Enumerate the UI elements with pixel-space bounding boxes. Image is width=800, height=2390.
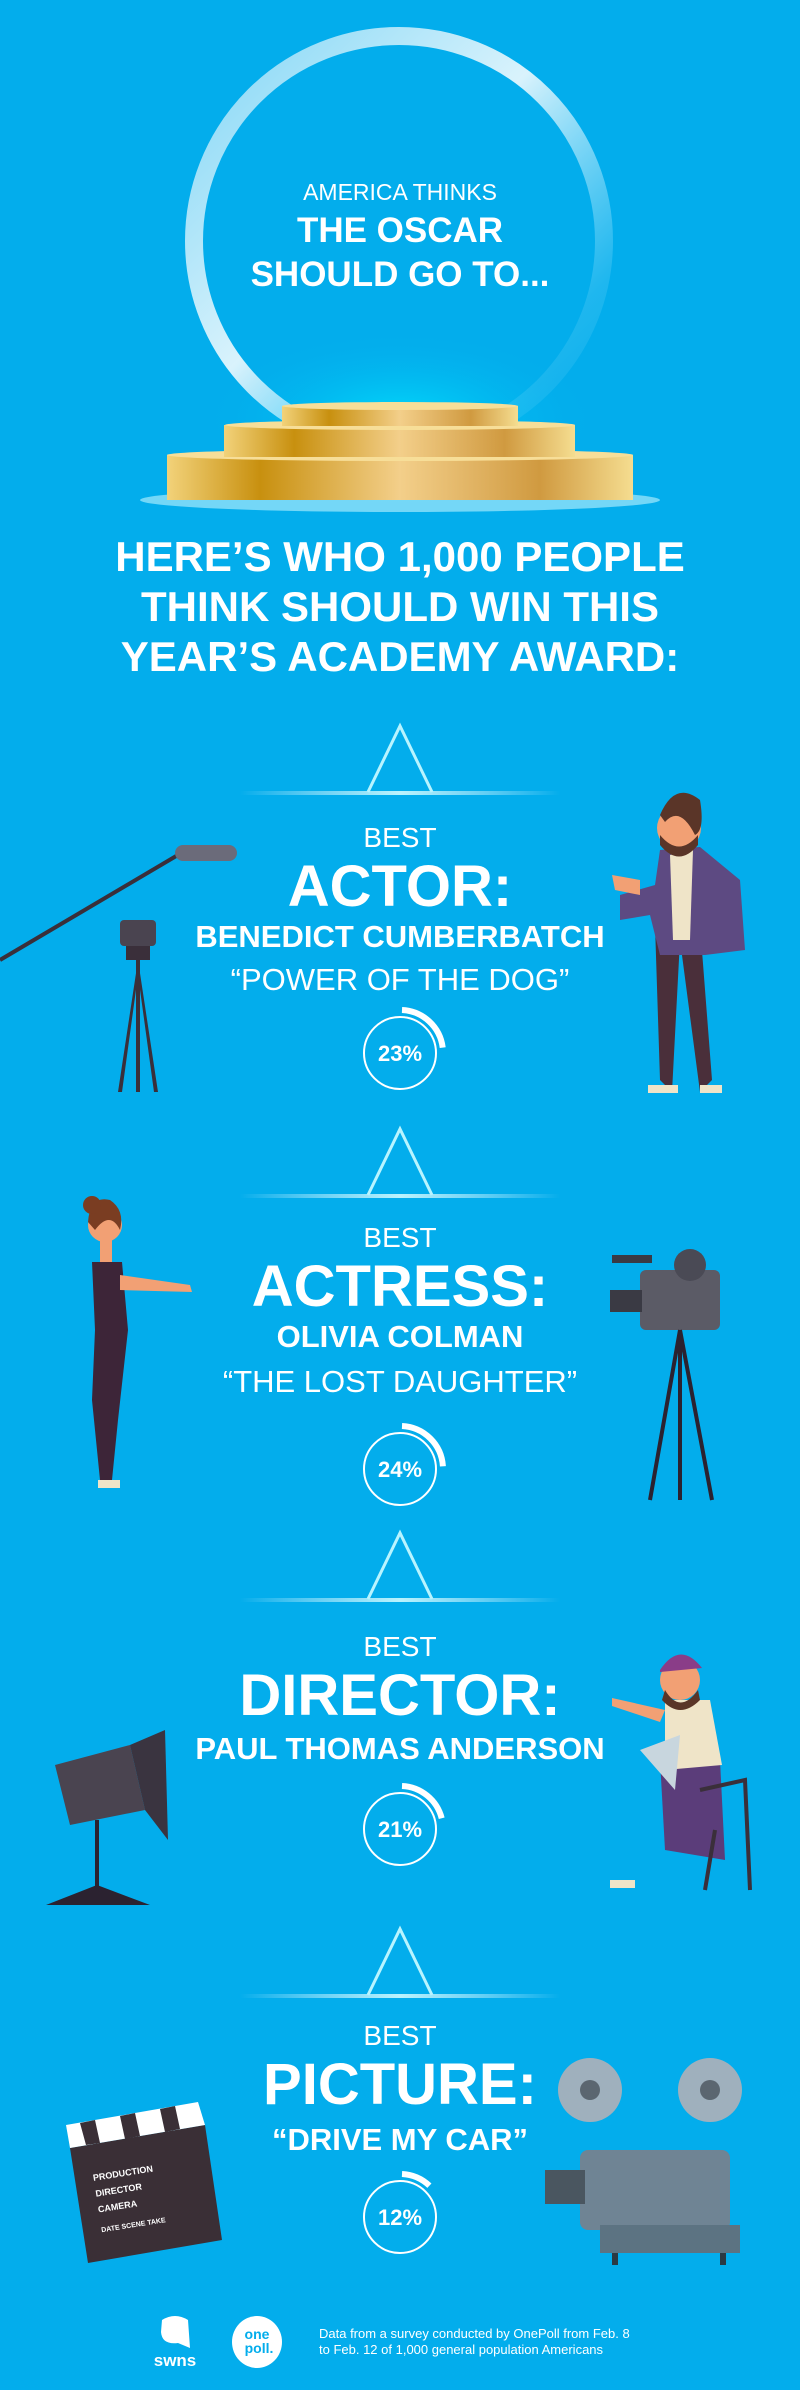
headline: YEAR’S ACADEMY AWARD: (121, 633, 679, 680)
icon: clapperboard (66, 2102, 222, 2263)
sparkle: director (240, 1533, 560, 1602)
icon: film camera on tripod (610, 1249, 720, 1500)
icon: boom mic (0, 845, 237, 960)
icon: clapperboard: PRODUCTION (92, 2164, 154, 2183)
icon: clapperboard: DIRECTOR (95, 2181, 143, 2199)
sparkle: actor (240, 726, 560, 795)
logo: swns: swns (154, 2351, 196, 2370)
percent: 12%: 12% (378, 2205, 422, 2230)
title: SHOULD GO TO... (251, 255, 549, 294)
percent: 24% (364, 1426, 443, 1505)
icon: clapperboard: CAMERA (97, 2198, 138, 2214)
hero: ring and podium (140, 36, 660, 512)
text: best picture (263, 2020, 537, 2157)
text: best director: BEST (363, 1631, 437, 1662)
text: best picture: PICTURE: (263, 2052, 537, 2117)
text: best picture: BEST (363, 2020, 437, 2051)
text: best actor: ACTOR: (288, 854, 512, 919)
icon: light stand (118, 920, 158, 1092)
percent: 23% (364, 1010, 443, 1089)
icon: spotlight (46, 1730, 168, 1905)
illustration: actor man (612, 793, 745, 1093)
sparkle: actress (240, 1129, 560, 1198)
text: best director: DIRECTOR: (239, 1663, 561, 1728)
text: best actor: “POWER OF THE DOG” (231, 962, 569, 997)
source note: to Feb. 12 of 1,000 general population Americans (319, 2342, 604, 2357)
percent: 21% (364, 1786, 442, 1865)
logo: swns (154, 2316, 196, 2370)
title (251, 179, 549, 294)
text: best actress (223, 1222, 577, 1399)
text: best actor: BENEDICT CUMBERBATCH (195, 919, 605, 954)
text: best picture: “DRIVE MY CAR” (272, 2122, 528, 2157)
percent: 21%: 21% (378, 1817, 422, 1842)
text: best actress: OLIVIA COLMAN (277, 1319, 523, 1354)
illustration: director (610, 1654, 750, 1890)
title: AMERICA THINKS (303, 179, 497, 205)
icon: film projector (545, 2058, 742, 2265)
headline: THINK SHOULD WIN THIS (141, 583, 659, 630)
percent: 24%: 24% (378, 1457, 422, 1482)
title: THE OSCAR (297, 211, 503, 250)
headline (115, 533, 685, 680)
text: best actress: “THE LOST DAUGHTER” (223, 1364, 577, 1399)
logo: onepoll: poll. (245, 2340, 273, 2356)
icon: clapperboard: DATE SCENE TAKE (101, 2217, 167, 2234)
percent: 23%: 23% (378, 1041, 422, 1066)
illustration: actress woman (83, 1196, 192, 1488)
logo: onepoll: one (245, 2326, 270, 2342)
text: best director (195, 1631, 605, 1766)
source note (319, 2326, 630, 2357)
text: best actress: BEST (363, 1222, 437, 1253)
logo: onepoll (232, 2316, 282, 2368)
text: best actor (195, 822, 605, 997)
source note: Data from a survey conducted by OnePoll from Feb. 8 (319, 2326, 630, 2341)
text: best actor: BEST (363, 822, 437, 853)
text: best director: PAUL THOMAS ANDERSON (195, 1731, 605, 1766)
text: best actress: ACTRESS: (252, 1254, 548, 1319)
percent: 12% (364, 2174, 436, 2253)
headline: HERE’S WHO 1,000 PEOPLE (115, 533, 685, 580)
sparkle: picture (240, 1929, 560, 1998)
